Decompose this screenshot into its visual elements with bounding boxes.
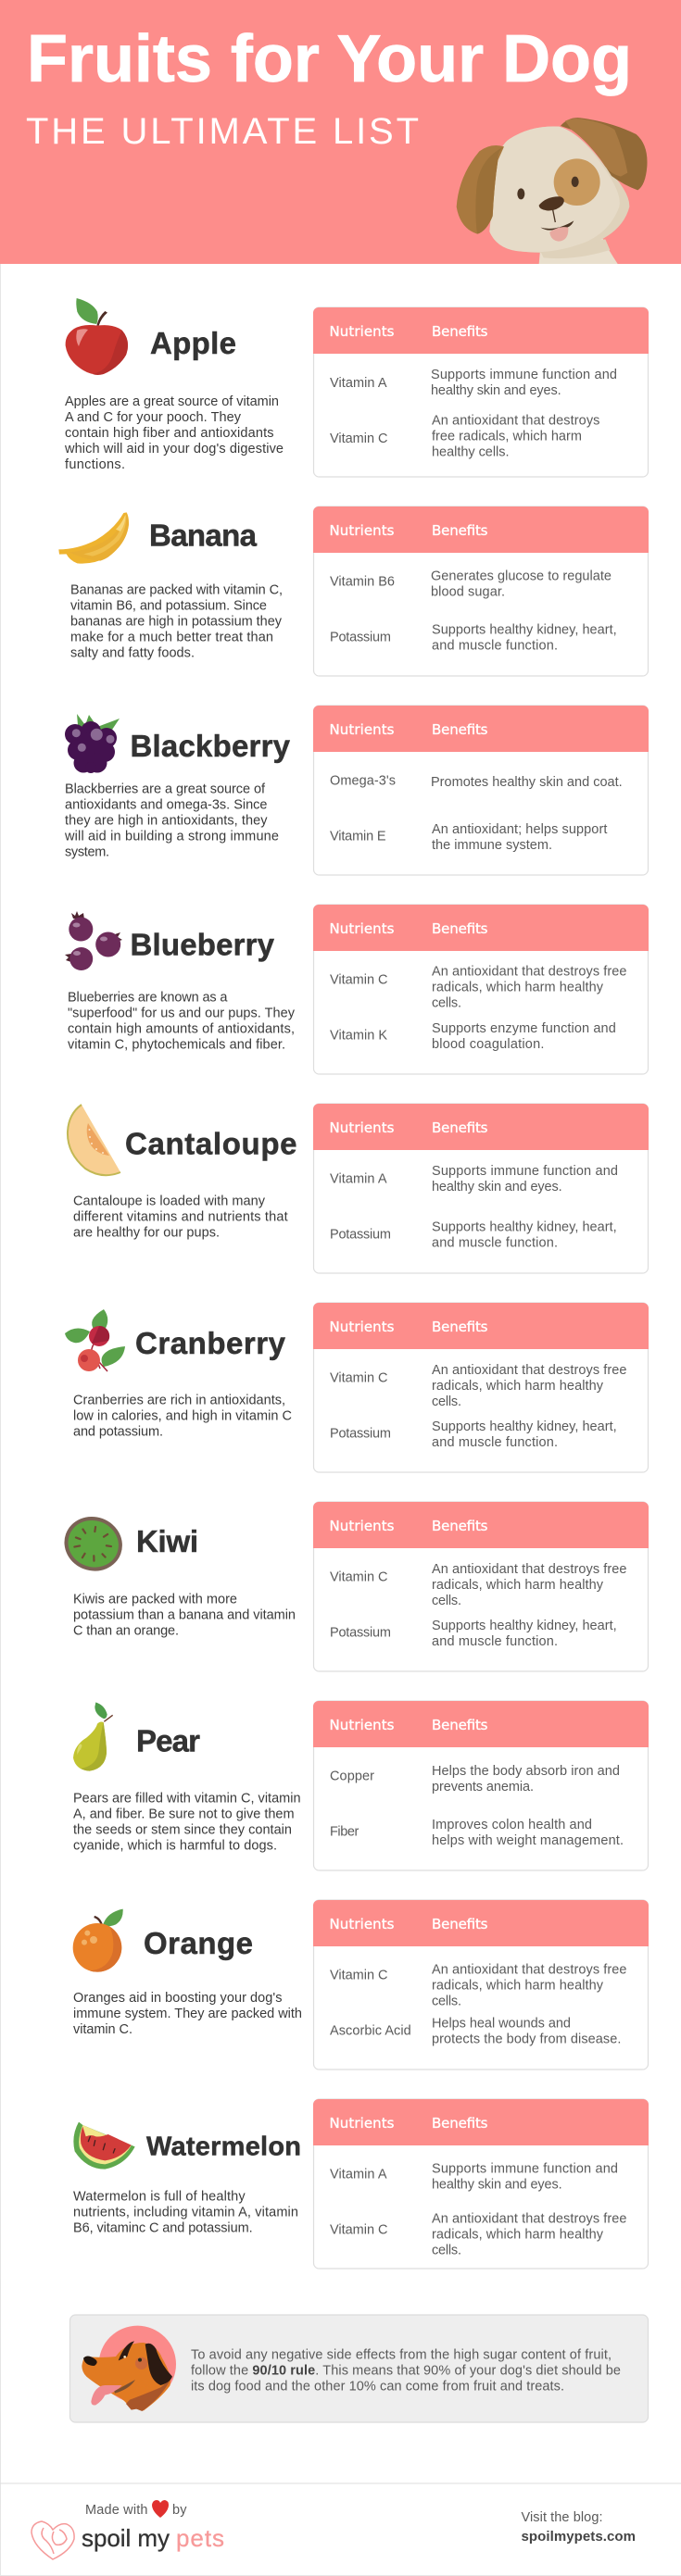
table: pear nutrients: Benefits <box>432 1717 488 1733</box>
table: cranberry nutrients: An antioxidant that destroys free <box>432 1363 626 1378</box>
table: blueberry nutrients: Nutrients <box>330 920 395 937</box>
table: blackberry nutrients: Vitamin E <box>330 830 386 844</box>
table: orange nutrients <box>313 1900 649 2070</box>
table: banana nutrients: and muscle function. <box>432 639 558 654</box>
description: Bananas are packed with vitamin C, <box>70 583 283 598</box>
icon: blackberry <box>65 714 120 773</box>
description: which will aid in your dog's digestive <box>64 442 284 456</box>
table: banana nutrients: Generates glucose to regulate <box>431 569 612 583</box>
table: pear nutrients: Nutrients <box>330 1717 395 1733</box>
description <box>64 782 279 859</box>
heading: Blackberry <box>130 729 291 763</box>
table: blueberry nutrients <box>313 905 649 1074</box>
table: cantaloupe nutrients: Potassium <box>330 1228 391 1243</box>
icon: heart <box>152 2500 169 2518</box>
description: vitamin C, phytochemicals and fiber. <box>68 1037 285 1052</box>
table: kiwi nutrients: Nutrients <box>330 1518 395 1534</box>
table: apple nutrients: An antioxidant that destroys <box>432 413 599 428</box>
table: blackberry nutrients: the immune system. <box>432 838 552 853</box>
table: blackberry nutrients: An antioxidant; helps support <box>432 822 607 837</box>
table: apple nutrients: Benefits <box>432 323 488 340</box>
description: the seeds or stem since they contain <box>73 1822 292 1837</box>
logo wordmark: spoil my <box>82 2524 170 2552</box>
table: watermelon nutrients: An antioxidant that destroys free <box>432 2212 626 2227</box>
table: kiwi nutrients: Vitamin C <box>330 1570 387 1585</box>
description <box>73 1593 296 1639</box>
table: cantaloupe nutrients: Supports immune function and <box>432 1164 618 1179</box>
description: potassium than a banana and vitamin <box>73 1607 296 1622</box>
section: pear <box>73 1702 301 1854</box>
description: cyanide, which is harmful to dogs. <box>73 1839 277 1854</box>
table: cranberry nutrients <box>313 1303 649 1472</box>
description <box>73 2189 298 2235</box>
by text: by <box>172 2503 187 2518</box>
section: kiwi <box>57 1508 296 1639</box>
table: kiwi nutrients: An antioxidant that destroys free <box>432 1562 626 1577</box>
table: kiwi nutrients: and muscle function. <box>432 1634 558 1649</box>
heading: Banana <box>149 519 258 552</box>
description <box>73 1393 292 1439</box>
table: blueberry nutrients: radicals, which harm healthy <box>432 981 604 995</box>
description: are healthy for our pups. <box>73 1226 220 1241</box>
description: Cranberries are rich in antioxidants, <box>73 1393 285 1407</box>
description <box>73 1791 301 1854</box>
description: contain high fiber and antioxidants <box>65 426 274 441</box>
table: banana nutrients: Nutrients <box>330 522 395 539</box>
icon: blueberries <box>65 911 122 970</box>
icon: cranberry <box>65 1309 125 1371</box>
table: orange nutrients: Benefits <box>432 1916 488 1932</box>
icon: pear <box>73 1702 113 1771</box>
table: banana nutrients: Benefits <box>432 522 488 539</box>
section: apple <box>64 298 284 472</box>
table: kiwi nutrients: Benefits <box>432 1518 488 1534</box>
table: apple nutrients: Vitamin C <box>330 431 387 446</box>
table: apple nutrients: free radicals, which harm <box>432 430 582 444</box>
description: low in calories, and high in vitamin C <box>73 1409 292 1424</box>
table: banana nutrients: Supports healthy kidney, heart, <box>432 622 617 637</box>
table: kiwi nutrients: Potassium <box>330 1626 391 1641</box>
description <box>64 394 284 472</box>
table: cranberry nutrients: Vitamin C <box>330 1370 387 1385</box>
table: pear nutrients: helps with weight management. <box>432 1833 624 1848</box>
heading: Kiwi <box>136 1524 198 1558</box>
icon: banana <box>58 512 129 564</box>
table: banana nutrients <box>313 506 649 676</box>
table: banana nutrients: Vitamin B6 <box>330 574 395 589</box>
section: blackberry <box>64 714 291 859</box>
tip text: follow the 90/10 rule. This means that 90% of your dog's diet should be <box>191 2363 621 2378</box>
description: A and C for your pooch. They <box>65 410 242 425</box>
table: cantaloupe nutrients: Vitamin A <box>330 1172 387 1187</box>
icon: logo hearts <box>32 2521 74 2559</box>
table: cranberry nutrients: Benefits <box>432 1319 488 1335</box>
description <box>73 1991 302 2037</box>
table: banana nutrients: blood sugar. <box>431 585 505 600</box>
description: salty and fatty foods. <box>70 646 195 661</box>
icon: cantaloupe <box>68 1105 120 1175</box>
icon: apple <box>66 298 128 375</box>
table: pear nutrients <box>313 1701 649 1870</box>
table: blueberry nutrients: Vitamin C <box>330 972 387 987</box>
table: cranberry nutrients: cells. <box>432 1394 461 1409</box>
description: Pears are filled with vitamin C, vitamin <box>73 1791 301 1806</box>
table: cranberry nutrients: Supports healthy kidney, heart, <box>432 1419 617 1434</box>
description: will aid in building a strong immune <box>64 830 279 844</box>
table: kiwi nutrients: cells. <box>432 1594 461 1608</box>
blog link <box>521 2510 636 2545</box>
section: cantaloupe <box>68 1105 296 1241</box>
table: orange nutrients: cells. <box>432 1995 461 2009</box>
table: apple nutrients: healthy cells. <box>432 444 510 459</box>
tip text: its dog food and the other 10% can come from fruit and treats. <box>191 2380 564 2395</box>
icon: orange <box>73 1909 123 1972</box>
callout: 90/10 rule <box>70 2315 649 2422</box>
description: antioxidants and omega-3s. Since <box>65 798 267 813</box>
icon: watermelon <box>73 2122 135 2170</box>
table: pear nutrients: Helps the body absorb iron and <box>432 1764 620 1779</box>
description: bananas are high in potassium they <box>70 615 283 630</box>
table: cantaloupe nutrients: healthy skin and eyes. <box>432 1180 562 1194</box>
table: blackberry nutrients: Promotes healthy skin and coat. <box>431 775 623 790</box>
footer credit <box>32 2500 224 2559</box>
table: apple nutrients: Nutrients <box>330 323 395 340</box>
icon: dog in circle <box>82 2326 176 2411</box>
table: orange nutrients: Vitamin C <box>330 1969 387 1983</box>
description: functions. <box>65 457 125 472</box>
icon: puppy <box>457 118 648 264</box>
table: kiwi nutrients: Supports healthy kidney, heart, <box>432 1619 617 1633</box>
table: kiwi nutrients <box>313 1502 649 1671</box>
table: blackberry nutrients: Benefits <box>432 721 488 738</box>
heading: Blueberry <box>130 928 275 961</box>
table: pear nutrients: Fiber <box>330 1824 359 1839</box>
blog link: spoilmypets.com <box>521 2529 636 2545</box>
description: immune system. They are packed with <box>73 2007 302 2021</box>
description: vitamin B6, and potassium. Since <box>70 598 267 613</box>
table: blueberry nutrients: Vitamin K <box>330 1028 387 1043</box>
table: cantaloupe nutrients: Supports healthy kidney, heart, <box>432 1220 617 1235</box>
table: blueberry nutrients: cells. <box>432 996 461 1011</box>
table: watermelon nutrients: Nutrients <box>330 2115 395 2132</box>
description: Watermelon is full of healthy <box>73 2189 246 2204</box>
blog link: Visit the blog: <box>521 2510 602 2525</box>
description: and potassium. <box>73 1424 163 1439</box>
description: system. <box>65 844 109 859</box>
description: Oranges aid in boosting your dog's <box>73 1991 282 2006</box>
description: different vitamins and nutrients that <box>73 1209 288 1224</box>
description: Kiwis are packed with more <box>73 1593 237 1607</box>
table: apple nutrients: Supports immune function and <box>431 368 617 382</box>
description <box>68 991 296 1052</box>
description: Cantaloupe is loaded with many <box>73 1194 266 1209</box>
table: cantaloupe nutrients: Benefits <box>432 1119 488 1136</box>
table: blackberry nutrients <box>313 706 649 875</box>
description: A, and fiber. Be sure not to give them <box>73 1807 295 1822</box>
table: blackberry nutrients: Omega-3's <box>330 774 396 789</box>
table: watermelon nutrients: Vitamin A <box>330 2167 387 2182</box>
description: they are high in antioxidants, they <box>65 813 268 828</box>
table: orange nutrients: radicals, which harm healthy <box>432 1979 604 1994</box>
table: blueberry nutrients: An antioxidant that destroys free <box>432 965 626 980</box>
description <box>73 1194 288 1241</box>
description: contain high amounts of antioxidants, <box>68 1022 295 1037</box>
section: orange <box>73 1909 302 2037</box>
table: pear nutrients: Improves colon health and <box>432 1818 592 1832</box>
description <box>70 583 283 661</box>
description: Blackberries are a great source of <box>65 782 266 796</box>
table: banana nutrients: Potassium <box>330 630 391 644</box>
table: orange nutrients: Ascorbic Acid <box>330 2024 411 2039</box>
table: cranberry nutrients: Nutrients <box>330 1319 395 1335</box>
table: cranberry nutrients: and muscle function. <box>432 1435 558 1450</box>
table: watermelon nutrients <box>313 2099 649 2269</box>
table: watermelon nutrients: Vitamin C <box>330 2222 387 2237</box>
header band <box>0 0 681 264</box>
table: orange nutrients: Helps heal wounds and <box>432 2017 571 2032</box>
table: watermelon nutrients: Supports immune function and <box>432 2162 618 2177</box>
section: cranberry <box>65 1309 292 1439</box>
title: Fruits for Your Dog <box>27 22 632 96</box>
table: watermelon nutrients: radicals, which harm healthy <box>432 2228 604 2243</box>
tip text <box>191 2348 621 2395</box>
heading: Cranberry <box>135 1326 286 1360</box>
table: blueberry nutrients: Benefits <box>432 920 488 937</box>
description: make for a much better treat than <box>70 630 273 644</box>
table: pear nutrients: prevents anemia. <box>432 1780 534 1794</box>
subtitle: THE ULTIMATE LIST <box>26 111 419 152</box>
table: apple nutrients: healthy skin and eyes. <box>431 383 561 398</box>
description: Apples are a great source of vitamin <box>65 394 279 409</box>
table: watermelon nutrients: Benefits <box>432 2115 488 2132</box>
section: blueberry <box>65 911 296 1052</box>
section: watermelon <box>73 2122 301 2235</box>
table: cantaloupe nutrients <box>313 1104 649 1273</box>
heading: Orange <box>144 1926 253 1960</box>
table: cantaloupe nutrients: Nutrients <box>330 1119 395 1136</box>
table: blackberry nutrients: Nutrients <box>330 721 395 738</box>
table: apple nutrients <box>313 307 649 477</box>
tip text: To avoid any negative side effects from the high sugar content of fruit, <box>191 2348 612 2363</box>
table: kiwi nutrients: radicals, which harm healthy <box>432 1578 604 1593</box>
description: vitamin C. <box>73 2022 132 2037</box>
heading: Cantaloupe <box>125 1126 296 1161</box>
table: cranberry nutrients: Potassium <box>330 1426 391 1441</box>
heading: Pear <box>136 1724 200 1757</box>
table: orange nutrients: Nutrients <box>330 1916 395 1932</box>
logo wordmark accent: pets <box>176 2524 224 2552</box>
table: watermelon nutrients: healthy skin and eyes. <box>432 2178 562 2193</box>
description: B6, vitaminc C and potassium. <box>73 2220 253 2235</box>
table: blueberry nutrients: Supports enzyme function and <box>432 1021 616 1036</box>
table: apple nutrients: Vitamin A <box>330 376 387 391</box>
icon: kiwi <box>57 1508 130 1579</box>
table: cranberry nutrients: radicals, which harm healthy <box>432 1379 604 1394</box>
heading: Apple <box>150 326 236 360</box>
section: banana <box>58 512 283 661</box>
description: Blueberries are known as a <box>68 991 228 1006</box>
description: C than an orange. <box>73 1624 179 1639</box>
table: watermelon nutrients: cells. <box>432 2244 461 2258</box>
table: orange nutrients: protects the body from disease. <box>432 2032 621 2047</box>
description: "superfood" for us and our pups. They <box>68 1006 296 1020</box>
table: cantaloupe nutrients: and muscle function. <box>432 1236 558 1251</box>
table: orange nutrients: An antioxidant that destroys free <box>432 1963 626 1978</box>
heading: Watermelon <box>146 2132 301 2161</box>
table: pear nutrients: Copper <box>330 1769 374 1783</box>
made with text: Made with <box>85 2503 148 2518</box>
description: nutrients, including vitamin A, vitamin <box>73 2206 298 2220</box>
table: blueberry nutrients: blood coagulation. <box>432 1037 544 1052</box>
